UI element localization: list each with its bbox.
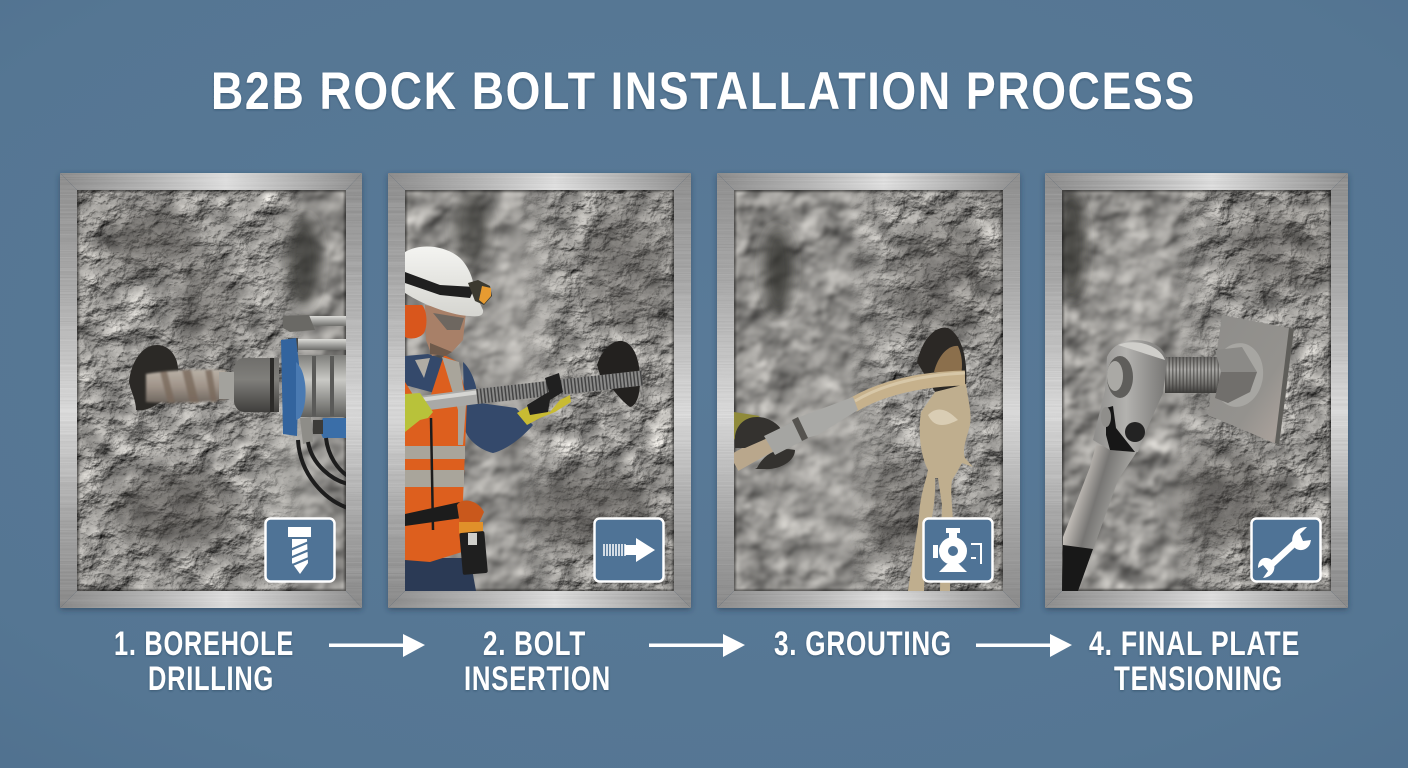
guide rods [310,316,346,326]
label: step 3: 3. GROUTING [774,625,952,663]
panel: step 1 borehole drilling [60,173,363,608]
borehole [917,328,966,392]
metal frame 1 [60,173,362,608]
handle hose [734,440,775,463]
glasses [433,313,464,330]
earmuff [405,305,426,338]
arrow: step 3 to 4 [976,634,1072,657]
grout flow [908,384,973,591]
label: step 2 [464,625,611,698]
grout hose and nozzle [734,328,973,591]
rock wall photo 1 [77,190,346,591]
panel: step 2 bolt insertion [388,173,691,608]
glove upper [735,417,783,448]
yellow cuff [734,412,760,440]
high-vis vest [405,355,467,562]
ratchet handle [1063,445,1138,550]
icon: drill screw [266,518,334,582]
rock wall photo 3 [734,190,1003,591]
metal frame 4 [1045,173,1348,608]
borehole [129,345,178,410]
helmet [405,246,483,316]
label: step 1 [114,625,294,698]
right glove [517,395,571,425]
drill rig [129,315,348,508]
title: B2B ROCK BOLT INSTALLATION PROCESS [211,62,1196,121]
shirt arm [463,362,533,453]
belt [405,502,462,526]
motor housing [296,355,348,417]
label: step 1: 1. BOREHOLE [114,625,294,663]
label: step 2: INSERTION [464,660,611,698]
arrow: step 1 to 2 [329,634,425,657]
stud end in ratchet [1107,356,1133,398]
rock wall photo 2 [405,190,674,591]
ratchet head [1093,340,1167,452]
icon: wrench [1252,518,1320,582]
shirt collar [405,354,442,392]
ratchet pawl and button [1106,406,1135,452]
panel: step 4 final plate tensioning [1045,173,1348,608]
face [425,305,466,356]
chuck [219,372,234,399]
label: step 1: DRILLING [148,660,274,698]
hex nut [1215,347,1257,403]
worker with bolt [405,246,642,591]
glove lower [755,449,795,469]
arrow: step 2 to 3 [649,634,745,657]
pants [405,558,476,591]
plate, bolt and ratchet [1062,315,1294,591]
label: step 4 [1089,625,1300,698]
blue plate [281,338,299,436]
icon: bolt arrow [594,518,664,582]
icon: pump [924,518,992,582]
panel: step 3 grouting [717,173,1020,608]
rubber grip [1062,545,1093,591]
label: step 4: TENSIONING [1114,660,1283,698]
metal frame 3 [717,173,1020,608]
spinning drill bit [146,370,226,403]
threaded bolt [417,396,480,404]
label: step 4: 4. FINAL PLATE [1089,625,1300,663]
headlamp [468,280,492,305]
anchor plate [1208,315,1294,445]
hose [853,378,965,405]
hoses [298,440,348,508]
borehole [597,341,640,407]
left glove [405,393,433,432]
metal coupling [764,421,804,455]
pouch [457,500,484,522]
label: step 2: 2. BOLT [483,625,586,663]
rock wall photo 4 [1045,173,1348,608]
washer [1209,340,1267,410]
metal frame 2 [388,173,691,608]
threaded stud [1165,357,1233,393]
